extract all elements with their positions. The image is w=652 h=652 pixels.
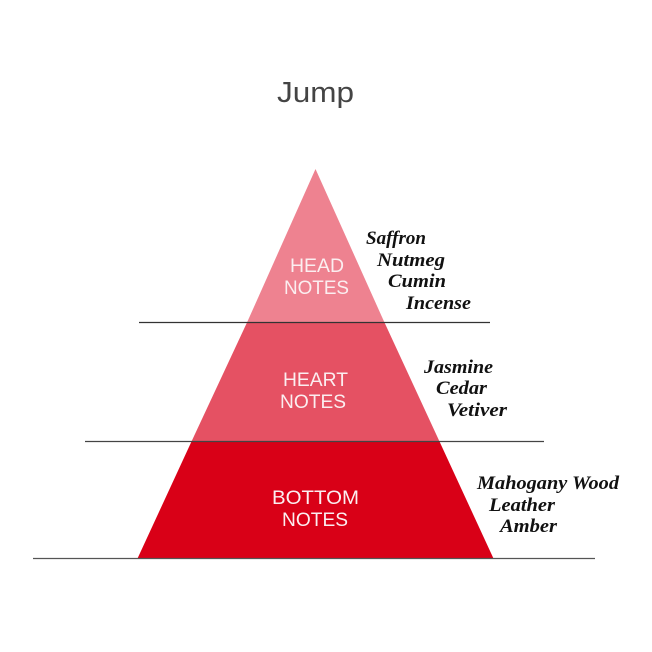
head notes ingredients: Nutmeg (376, 250, 445, 271)
head notes label (284, 256, 349, 299)
bottom notes ingredients: Amber (499, 516, 558, 537)
bottom notes label: NOTES (282, 510, 348, 531)
heart notes ingredients (423, 357, 508, 421)
heart notes ingredients: Jasmine (423, 357, 494, 378)
bottom notes label (272, 488, 359, 531)
pyramid tier: head notes (247, 169, 384, 322)
heart notes label: HEART (283, 370, 348, 391)
heart notes ingredients: Vetiver (447, 400, 508, 421)
title: Jump (277, 77, 354, 109)
head notes label: NOTES (284, 278, 349, 299)
head notes ingredients: Incense (405, 293, 472, 314)
pyramid tier: bottom notes (138, 442, 494, 558)
heart notes ingredients: Cedar (436, 378, 488, 399)
bottom notes ingredients: Leather (488, 495, 556, 516)
heart notes label: NOTES (280, 392, 346, 413)
head notes label: HEAD (290, 256, 344, 277)
head notes ingredients (366, 228, 472, 314)
heart notes label (280, 370, 348, 413)
pyramid (138, 169, 494, 558)
pyramid tier: heart notes (192, 322, 440, 442)
bottom notes ingredients (476, 473, 620, 537)
divider lines (33, 322, 595, 558)
head notes ingredients: Saffron (366, 228, 426, 249)
bottom notes label: BOTTOM (272, 488, 359, 509)
bottom notes ingredients: Mahogany Wood (476, 473, 620, 494)
head notes ingredients: Cumin (388, 271, 446, 292)
